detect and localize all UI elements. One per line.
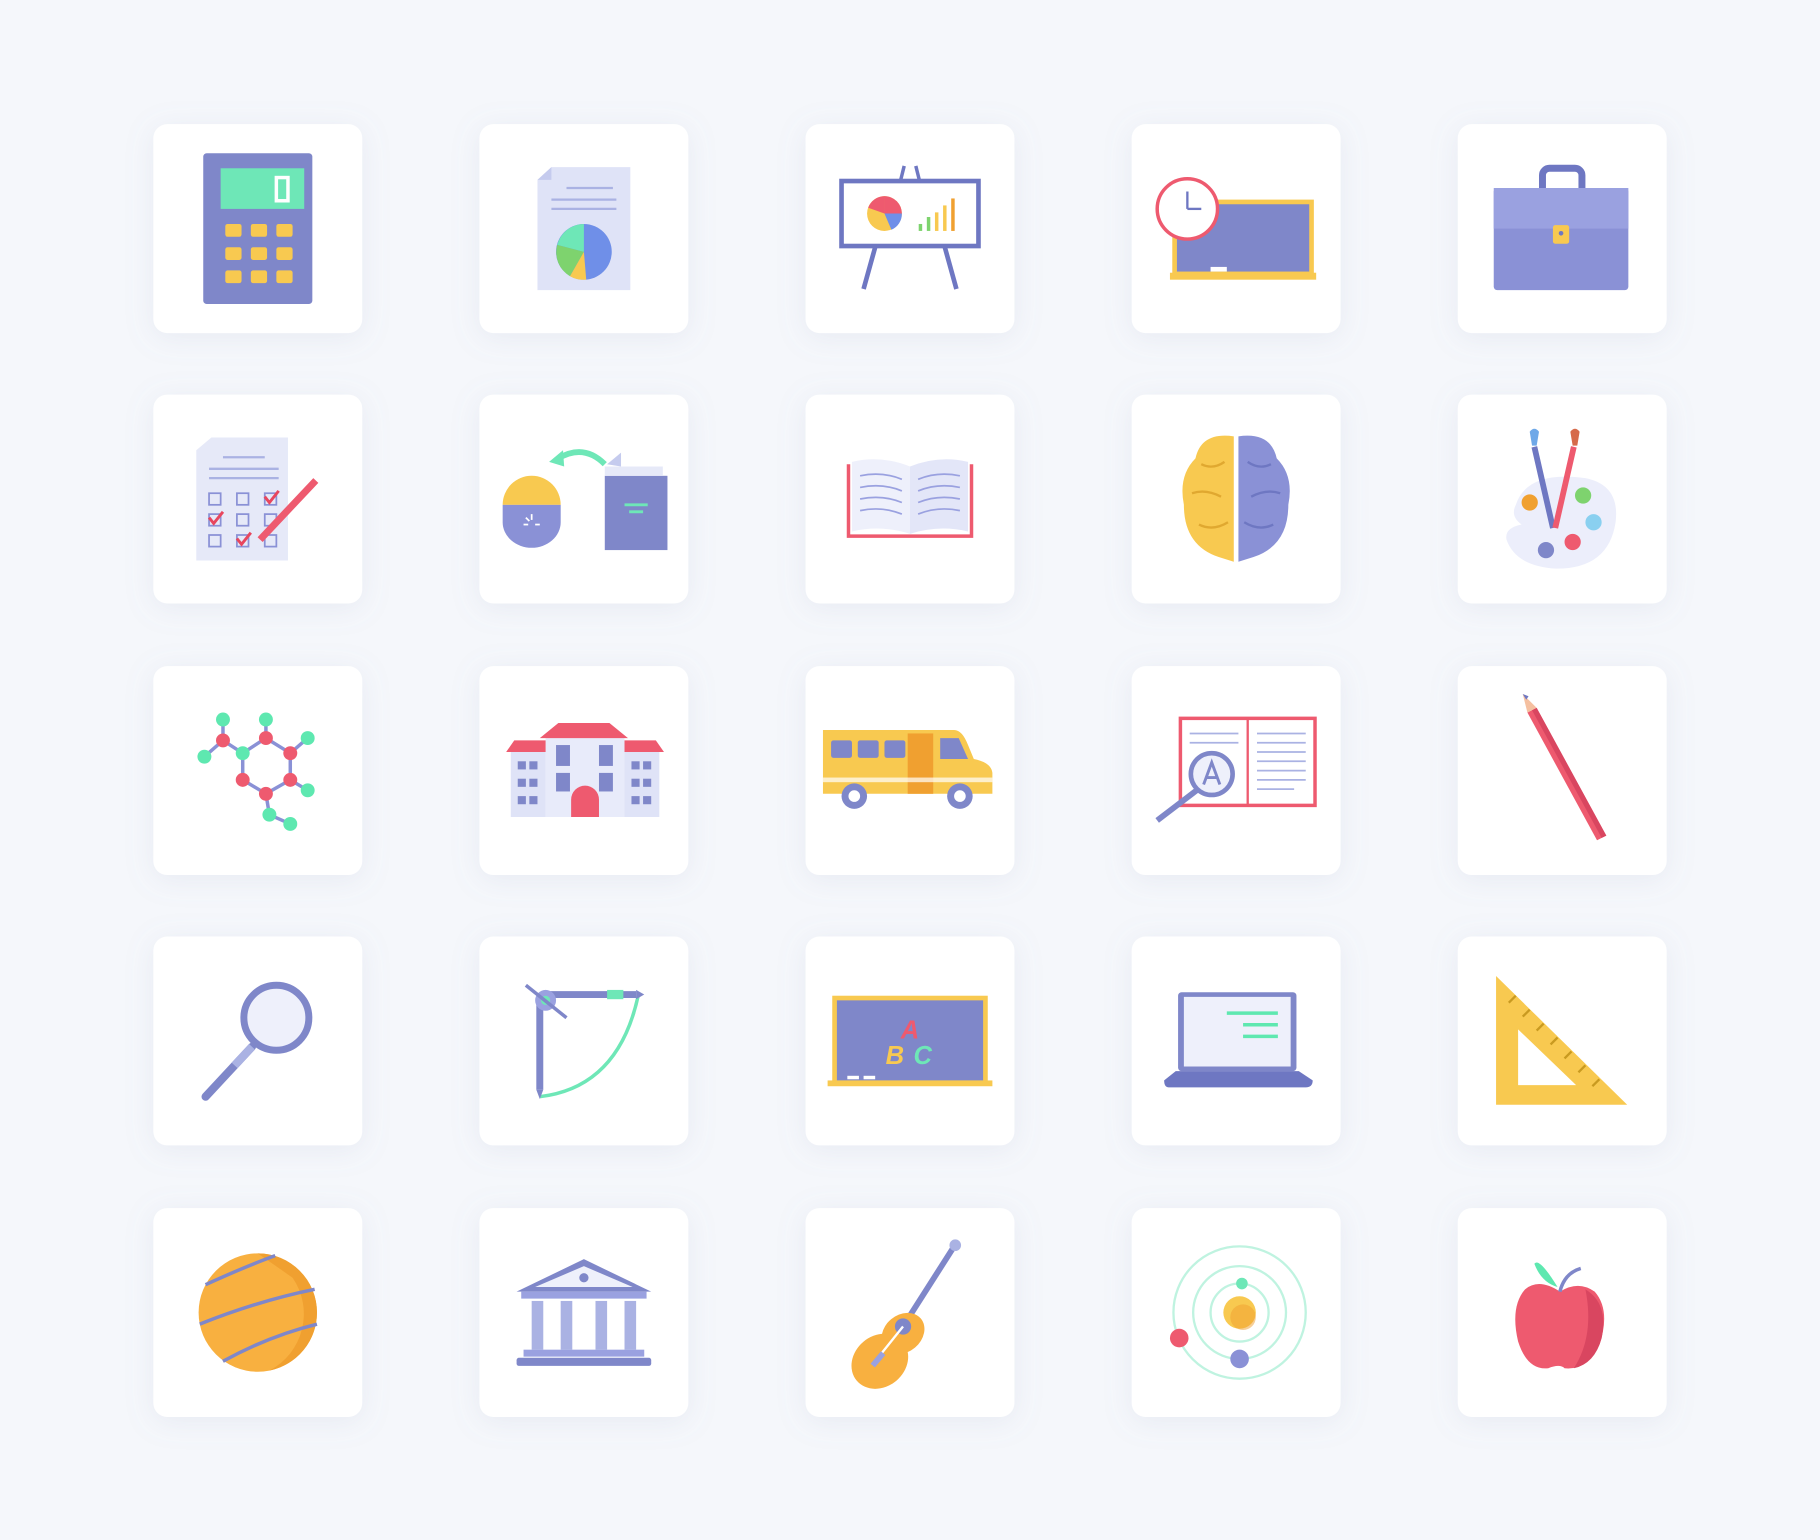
card: ABC chalkboard: A: [900, 1017, 919, 1045]
card: checklist: [153, 395, 362, 603]
card: ABC chalkboard: [806, 937, 1014, 1145]
card: molecule: [153, 666, 362, 875]
card: pencil: [1458, 666, 1667, 875]
card: dictionary with magnifier: [1132, 666, 1341, 875]
card: report with pie chart: [479, 124, 688, 333]
card: ABC chalkboard: B: [886, 1042, 904, 1070]
card: laptop: [1132, 937, 1341, 1145]
card: brain to book: [479, 395, 688, 603]
card: school building: [479, 666, 688, 875]
card: calculator: [153, 124, 362, 333]
card: school bus: [806, 666, 1014, 875]
card: clock and blackboard: [1132, 124, 1341, 333]
card: apple: [1458, 1208, 1667, 1417]
card: set square: [1458, 937, 1667, 1145]
card: brain: [1132, 395, 1341, 603]
card: museum / bank: [479, 1208, 688, 1417]
card: drawing compass: [479, 937, 688, 1145]
card: presentation easel: [806, 124, 1014, 333]
card: ABC chalkboard: C: [913, 1042, 932, 1070]
card: guitar: [806, 1208, 1014, 1417]
card: open book: [806, 395, 1014, 603]
card: paint palette: [1458, 395, 1667, 603]
card: solar system: [1132, 1208, 1341, 1417]
card: briefcase: [1458, 124, 1667, 333]
card: magnifying glass: [153, 937, 362, 1145]
card: basketball: [153, 1208, 362, 1417]
